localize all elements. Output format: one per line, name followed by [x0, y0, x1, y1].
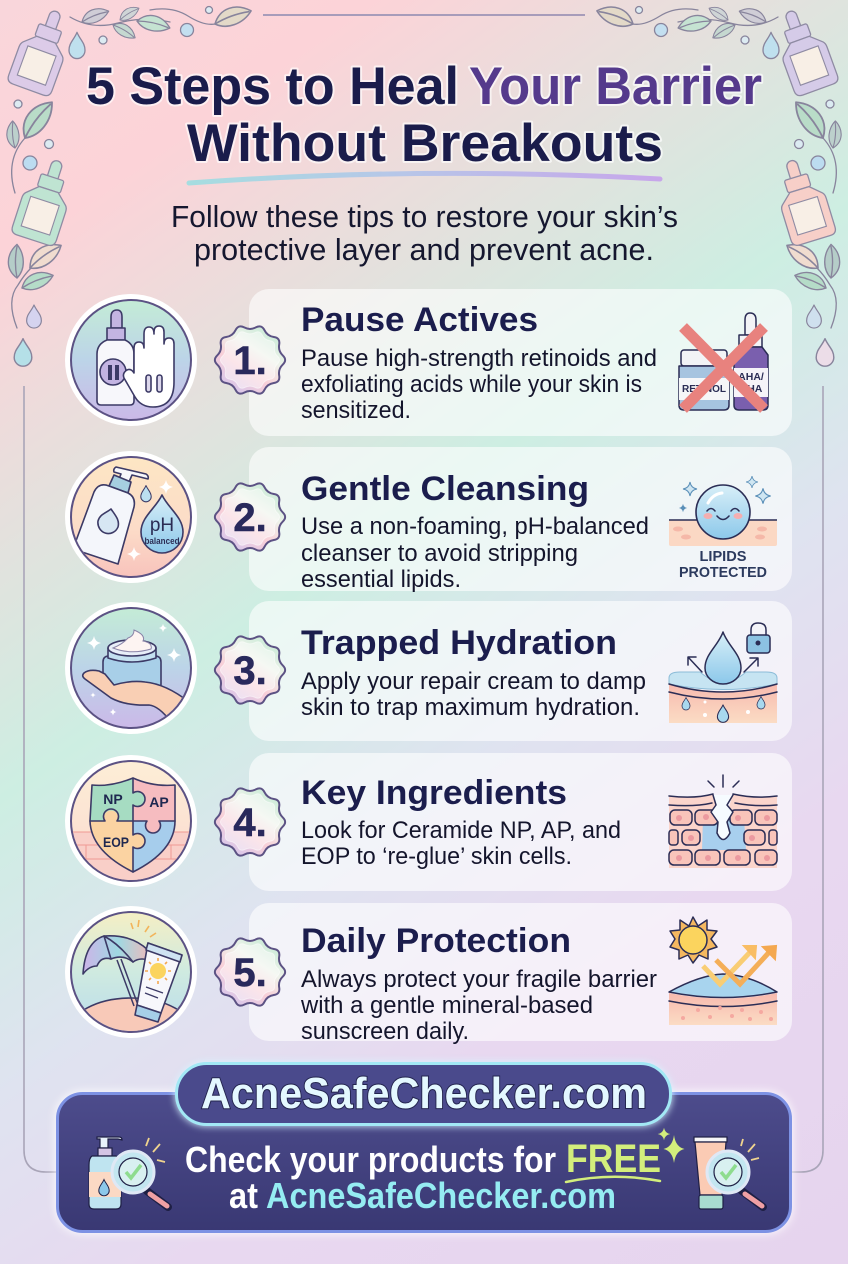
- body text: Pause high-strength retinoids and: [301, 345, 657, 372]
- body text: skin to trap maximum hydration.: [301, 694, 640, 721]
- icon: lipids protected: [669, 476, 777, 581]
- step 4 panel: [249, 753, 792, 891]
- icon: pump bottle: [73, 467, 148, 564]
- ground: [84, 997, 178, 1031]
- body text: essential lipids.: [301, 566, 461, 593]
- icon: pH balanced drop: balanced: [144, 536, 180, 547]
- step 2 number badge: [215, 483, 285, 551]
- body text: [301, 345, 657, 424]
- icon: puzzle shield: AP: [149, 794, 169, 810]
- icon: lipids protected: PROTECTED: [679, 564, 767, 581]
- subtitle: Follow these tips to restore your skin’s: [171, 199, 678, 234]
- step 4 circle icon: [65, 755, 197, 887]
- call to action text: AcneSafeChecker.com: [266, 1175, 616, 1216]
- body text: [301, 668, 646, 721]
- title: Without Breakouts: [187, 114, 663, 173]
- step 5 circle icon: [65, 906, 197, 1038]
- body text: [301, 513, 649, 593]
- body text: Look for Ceramide NP, AP, and: [301, 817, 621, 844]
- body text: sunscreen daily.: [301, 1018, 469, 1045]
- icon: umbrella: [83, 936, 153, 1006]
- icon: crossed-out actives: RETINOL: [682, 383, 727, 395]
- icon: pH balanced drop: pH: [150, 515, 174, 536]
- icon: puzzle shield: NP: [103, 791, 123, 807]
- heading: Key Ingredients: [301, 774, 567, 812]
- step 1 circle icon: [65, 294, 197, 426]
- icon: hydration locked: [669, 623, 777, 723]
- body text: Use a non-foaming, pH-balanced: [301, 513, 649, 540]
- icon: cracked skin cells: [669, 775, 777, 868]
- title: [86, 57, 762, 173]
- icon: lipids protected: LIPIDS: [700, 548, 746, 565]
- step 1 panel: [249, 289, 792, 436]
- heading: Daily Protection: [301, 922, 571, 960]
- card background: [249, 903, 792, 1041]
- card background: [249, 289, 792, 436]
- step 4 number badge: [215, 788, 285, 856]
- body text: sensitized.: [301, 397, 411, 424]
- body text: exfoliating acids while your skin is: [301, 371, 642, 398]
- icon: pump bottle with magnifier: [89, 1137, 168, 1209]
- subtitle: protective layer and prevent acne.: [194, 232, 654, 267]
- card background: [249, 601, 792, 741]
- icon: puzzle shield: EOP: [103, 834, 129, 850]
- icon: crossed-out actives: AHA/: [738, 371, 764, 383]
- body text: Apply your repair cream to damp: [301, 668, 646, 695]
- call to action text: at: [229, 1175, 258, 1216]
- icon: stop hand: [123, 326, 174, 407]
- botanical decoration: top left: [6, 2, 254, 366]
- call to action text: Check your products for: [185, 1139, 556, 1180]
- bricks backdrop: [71, 832, 191, 881]
- step 3 panel: [249, 601, 792, 741]
- heading: Trapped Hydration: [301, 624, 617, 662]
- step 4 number badge: 4.: [233, 801, 267, 845]
- icon: cream jar: [103, 630, 161, 690]
- top divider line: [263, 14, 585, 16]
- step 2 number badge: 2.: [233, 496, 267, 540]
- icon: bottle: [97, 310, 134, 405]
- step 1 number badge: [215, 326, 285, 394]
- title: Your Barrier: [469, 57, 762, 116]
- icon: pH balanced drop: [141, 495, 183, 553]
- call to action text: [185, 1137, 661, 1216]
- body text: [301, 817, 621, 870]
- icon: sunscreen tube: [135, 943, 182, 1022]
- title underline: [189, 173, 660, 183]
- step 2 circle icon: [65, 451, 197, 583]
- body text: Always protect your fragile barrier: [301, 966, 657, 993]
- icon: crossed-out actives: BHA: [740, 383, 763, 395]
- subtitle: [171, 199, 678, 267]
- step 3 circle icon: [65, 602, 197, 734]
- body text: [300, 966, 657, 1045]
- icon: sparkle: [658, 1128, 684, 1163]
- heading: Pause Actives: [301, 301, 538, 339]
- icon: puzzle shield: [90, 778, 175, 872]
- step 1 number badge: 1.: [233, 339, 267, 383]
- step 3 number badge: [215, 636, 285, 704]
- title: 5 Steps to Heal: [86, 57, 459, 116]
- panel background: [58, 1094, 790, 1232]
- step 3 number badge: 3.: [233, 649, 267, 693]
- icon: crossed-out actives: [679, 313, 768, 410]
- body text: with a gentle mineral-based: [300, 992, 593, 1019]
- heading: Gentle Cleansing: [301, 470, 589, 508]
- call to action text: FREE: [566, 1137, 661, 1181]
- frame line: [24, 386, 823, 1172]
- body text: EOP to ‘re-glue’ skin cells.: [301, 843, 572, 870]
- body text: cleanser to avoid stripping: [301, 540, 578, 567]
- website pill: AcneSafeChecker.com: [201, 1069, 647, 1118]
- icon: hand: [82, 670, 182, 716]
- icon: sun and skin shield: [669, 917, 777, 1025]
- call to action panel: [58, 1064, 790, 1232]
- step 5 number badge: 5.: [233, 951, 267, 995]
- step 5 number badge: [215, 938, 285, 1006]
- icon: tube with magnifier: [694, 1137, 763, 1209]
- card background: [249, 753, 792, 891]
- botanical decoration: top right: [594, 2, 842, 366]
- card background: [249, 447, 792, 591]
- step 5 panel: [249, 903, 792, 1045]
- icon: small drop: [141, 486, 151, 502]
- step 2 panel: [249, 447, 792, 593]
